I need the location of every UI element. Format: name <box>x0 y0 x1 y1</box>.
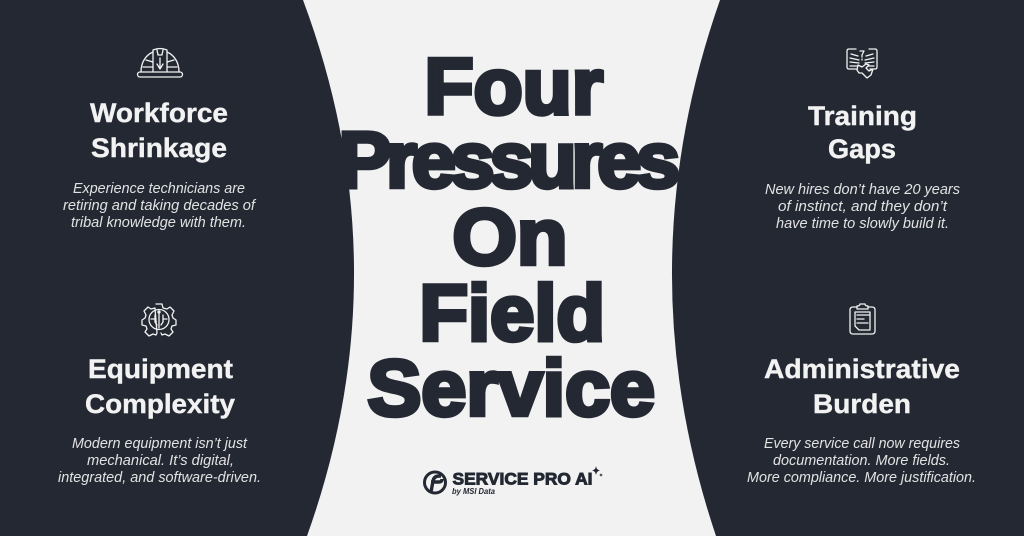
heading: administrative burden: Administrative <box>764 354 960 384</box>
text: workforce description <box>63 181 257 231</box>
heading: workforce shrinkage: Shrinkage <box>91 133 227 163</box>
panel: workforce shrinkage <box>63 48 257 231</box>
text: administrative description: More compliance. More justification. <box>747 470 976 486</box>
text: equipment description: integrated, and software-driven. <box>58 470 261 486</box>
text: training description: of instinct, and they don’t <box>778 199 948 215</box>
panel: left dark curved panel <box>0 0 354 536</box>
logo: service pro ai: by MSI Data <box>452 487 496 496</box>
logo: service pro ai <box>424 466 603 496</box>
text: training description: New hires don’t have 20 years <box>765 182 960 198</box>
icon: hard hat <box>138 48 182 77</box>
text: equipment description: Modern equipment isn’t just <box>72 436 248 452</box>
text: administrative description: documentation. More fields. <box>773 453 950 469</box>
title: Pressures <box>338 115 680 204</box>
title: On <box>452 192 568 281</box>
heading: equipment complexity: Complexity <box>85 389 235 419</box>
text: workforce description: retiring and taking decades of <box>63 198 257 214</box>
text: workforce description: tribal knowledge with them. <box>71 215 246 231</box>
heading: training gaps <box>808 101 917 164</box>
heading: training gaps: Gaps <box>828 134 896 164</box>
text: administrative description <box>747 436 976 486</box>
text: training description: have time to slowly build it. <box>776 216 949 232</box>
heading: equipment complexity <box>85 354 235 419</box>
heading: workforce shrinkage: Workforce <box>90 98 228 128</box>
icon: hands and wrench training <box>847 49 877 78</box>
icon: sparkles <box>592 466 603 477</box>
heading: equipment complexity: Equipment <box>88 354 233 384</box>
text: equipment description <box>58 436 261 486</box>
logo: service pro ai: SERVICE PRO AI <box>452 470 592 488</box>
title <box>338 41 680 432</box>
heading: training gaps: Training <box>808 101 917 131</box>
panel: equipment complexity <box>58 304 261 486</box>
text: administrative description: Every service call now requires <box>764 436 960 452</box>
panel: training gaps <box>765 49 960 232</box>
text: equipment description: mechanical. It’s digital, <box>87 453 234 469</box>
title: Field <box>420 268 605 357</box>
icon: logo mark <box>424 472 446 493</box>
icon: gear with circuit <box>142 304 176 336</box>
text: training description <box>765 182 960 232</box>
panel: administrative burden <box>747 304 976 486</box>
text: workforce description: Experience technicians are <box>73 181 245 197</box>
icon: clipboard <box>850 304 875 334</box>
heading: administrative burden <box>764 354 960 419</box>
panel: right dark curved panel <box>672 0 1024 536</box>
heading: workforce shrinkage <box>90 98 228 163</box>
title: Four <box>424 41 603 130</box>
title: Service <box>368 343 655 432</box>
heading: administrative burden: Burden <box>813 389 911 419</box>
